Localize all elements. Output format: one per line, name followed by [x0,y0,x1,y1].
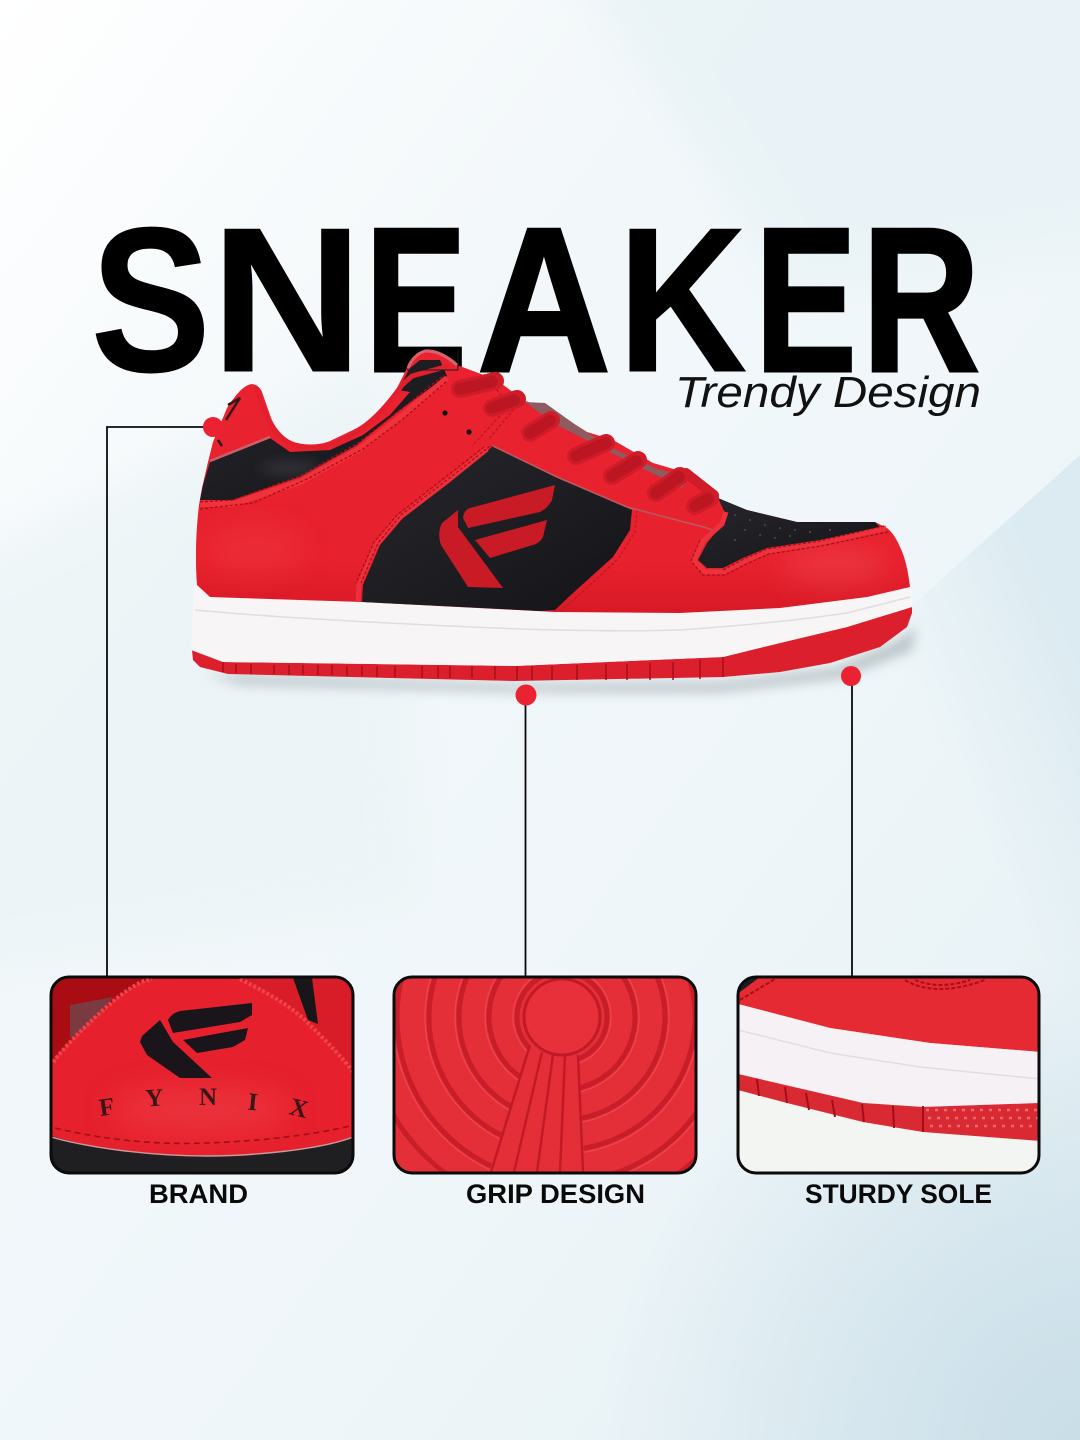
title: E [755,185,857,415]
upper highlights [205,525,890,585]
FYNIX lettering: N [199,1084,217,1111]
eyelets [442,410,448,416]
toe cap stitching [694,512,886,572]
panel: grip design photo [392,976,698,1174]
toe perforations [735,515,830,540]
heel logo fragment [218,398,240,446]
title: R [862,185,980,415]
label: grip design: GRIP DESIGN [466,1179,645,1209]
FYNIX lettering: Y [145,1084,164,1113]
toe box black [698,498,880,568]
title [91,185,980,415]
tongue edge [408,351,457,368]
callout: brand connector [107,417,223,976]
subtitle: Trendy Design [675,368,981,417]
eyestay stitching [472,378,513,446]
title: K [618,185,747,415]
quarter panel stitch bands [358,449,487,601]
upper base [196,350,910,613]
logo on quarter panel [439,485,555,588]
outsole [192,607,912,681]
midsole [191,580,912,666]
sole shadow [205,625,915,692]
quarter panel black [362,446,632,611]
panel: sturdy sole photo [738,977,1040,1173]
heel tab edge [210,437,270,461]
heel panel sheen [260,461,320,475]
label: brand: BRAND [149,1179,248,1209]
sneaker illustration [191,349,915,692]
title: N [211,185,363,415]
FYNIX lettering: F [98,1093,116,1122]
callout: sole connector [841,666,861,976]
logo on heel [140,1003,252,1078]
callout: grip connector [516,684,536,976]
FYNIX lettering: I [247,1089,259,1116]
heel black panel [200,360,447,500]
laces [460,381,714,506]
title: E [365,185,467,415]
tongue showing between laces [525,402,690,488]
FYNIX lettering: X [287,1093,311,1124]
title: S [91,185,211,415]
FYNIX lettering [98,1088,308,1118]
collar trim [256,367,445,447]
quarter stitching [200,378,447,504]
label: sturdy sole: STURDY SOLE [805,1179,992,1209]
title: A [477,185,611,415]
title outline trace [407,349,458,370]
panel: brand photo [51,977,353,1175]
